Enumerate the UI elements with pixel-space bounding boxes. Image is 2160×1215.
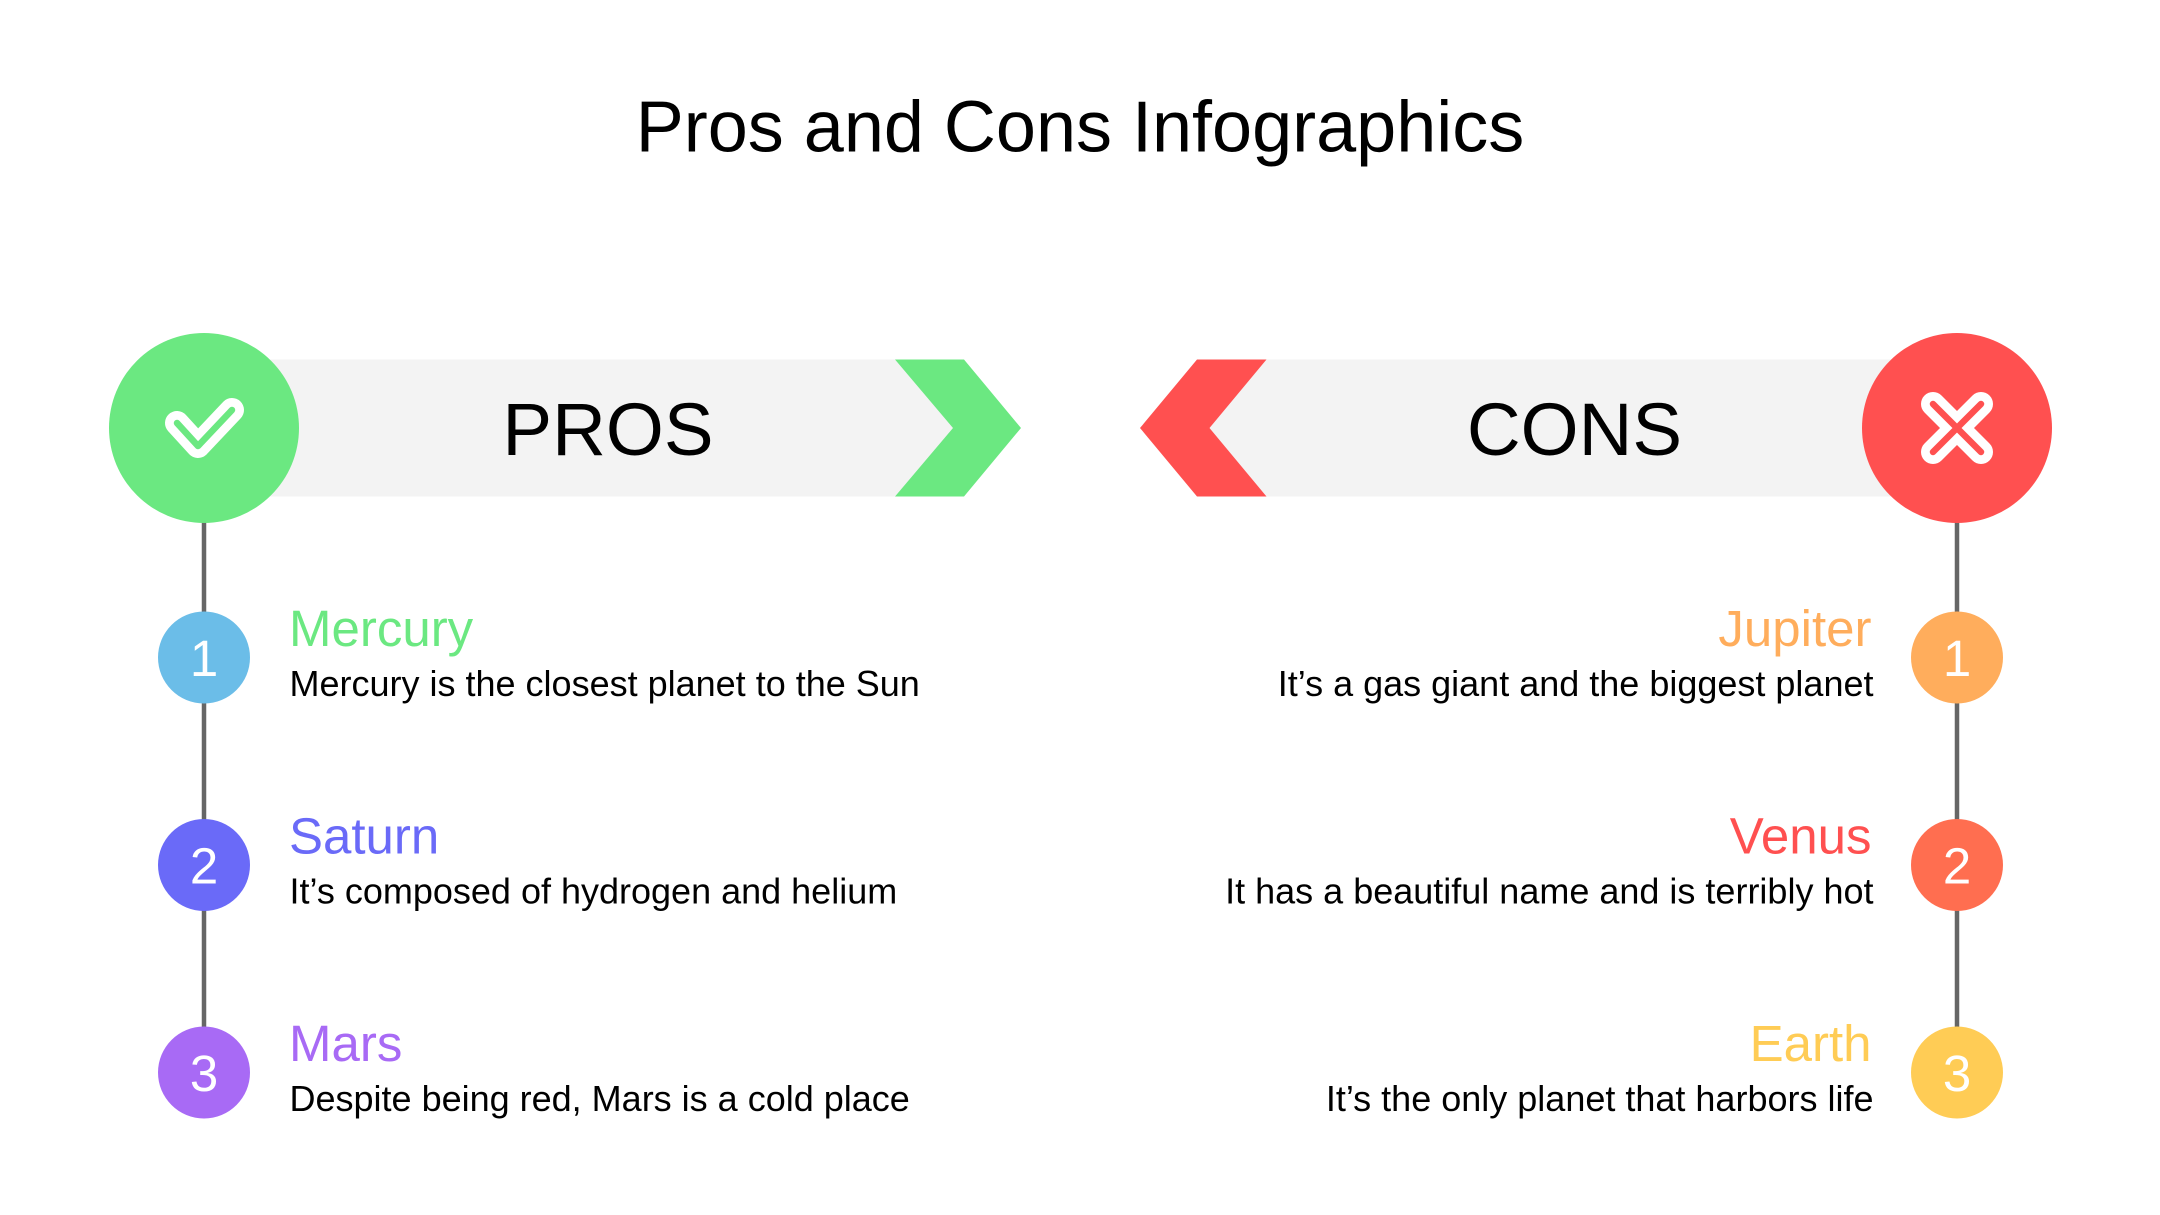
item: Venus: It has a beautiful name and is terribly hot xyxy=(1225,870,1874,912)
icon: check mark in circle xyxy=(109,333,299,523)
item: Venus: 2 xyxy=(1943,838,1971,894)
item: Mars xyxy=(158,1015,910,1119)
title: Pros and Cons Infographics xyxy=(636,88,1524,168)
item: Saturn: Saturn xyxy=(289,808,439,864)
connector line: pros xyxy=(202,500,206,1072)
arrow: cons chevron xyxy=(1140,360,1266,496)
item: Earth: It’s the only planet that harbors life xyxy=(1326,1078,1874,1119)
item: Jupiter: Jupiter xyxy=(1718,600,1872,657)
item: Mars: 3 xyxy=(190,1045,218,1102)
item: Jupiter: It’s a gas giant and the biggest planet xyxy=(1278,663,1874,704)
item: Mars: Mars xyxy=(289,1015,402,1072)
connector line: cons xyxy=(1955,500,1959,1072)
item: Saturn xyxy=(158,808,897,912)
item: Earth: Earth xyxy=(1750,1015,1872,1072)
item: Saturn: 2 xyxy=(190,838,218,894)
item: Earth: 3 xyxy=(1943,1045,1971,1102)
item: Mercury: 1 xyxy=(190,630,218,687)
item: Jupiter xyxy=(1278,600,2003,704)
item: Jupiter: 1 xyxy=(1943,630,1971,687)
item: Mars: Despite being red, Mars is a cold place xyxy=(290,1078,910,1119)
banner: cons xyxy=(1209,360,1957,496)
heading: pros: PROS xyxy=(502,388,714,471)
banner: pros xyxy=(204,360,956,496)
item: Mercury: Mercury xyxy=(289,600,474,657)
panel: pros xyxy=(109,333,1021,1119)
item: Saturn: It’s composed of hydrogen and helium xyxy=(290,870,897,912)
item: Earth xyxy=(1326,1015,2003,1119)
item: Mercury xyxy=(158,600,920,704)
heading: cons: CONS xyxy=(1467,388,1682,471)
item: Mercury: Mercury is the closest planet to the Sun xyxy=(290,663,920,704)
icon: cross in circle xyxy=(1862,333,2052,523)
panel: cons xyxy=(1140,333,2052,1119)
arrow: pros chevron xyxy=(895,360,1021,496)
item: Venus xyxy=(1225,808,2003,912)
item: Venus: Venus xyxy=(1730,808,1872,864)
